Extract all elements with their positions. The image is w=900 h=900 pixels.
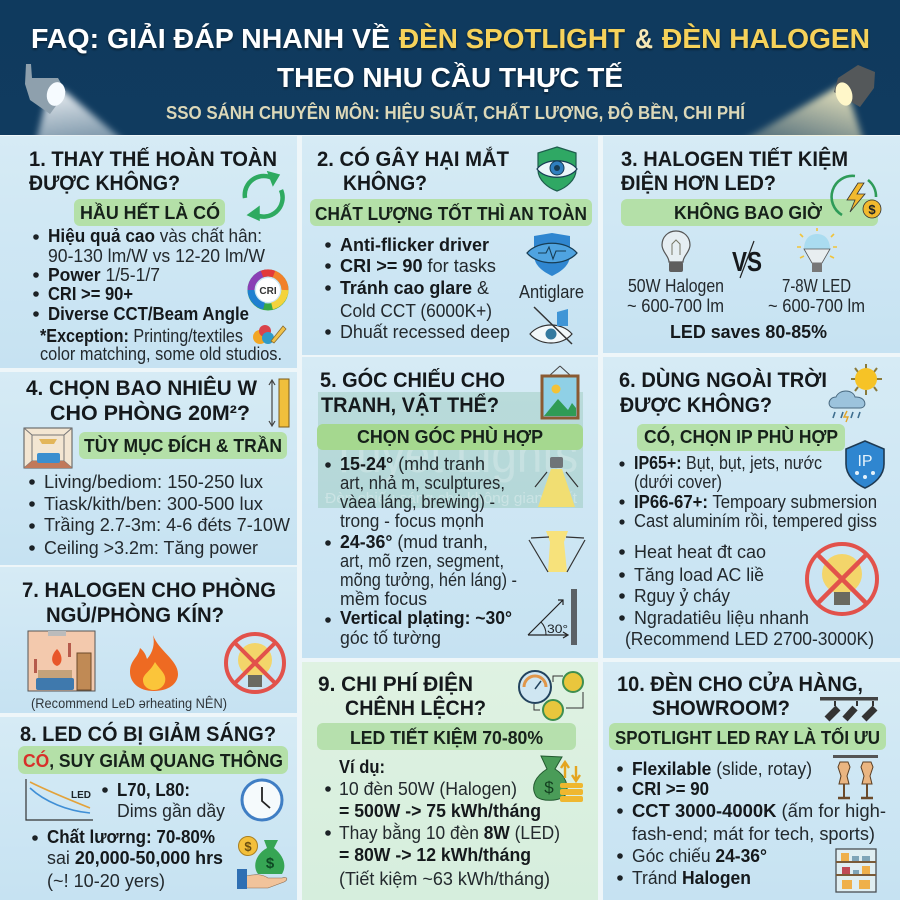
- heading 4: CHO PHÒNG 20M²?: [50, 401, 250, 425]
- bullet list 2: Dhuất recessed deep: [340, 322, 510, 342]
- heading 1: [29, 148, 277, 195]
- icon: versus: VS: [732, 246, 762, 277]
- icon: money in hand: $: [266, 855, 275, 872]
- chart: lumen decay: [26, 779, 93, 820]
- panel 10: shop lighting: [603, 662, 900, 900]
- heading 7: 7. HALOGEN CHO PHÒNG: [22, 578, 276, 602]
- bullet list 10: fash-end; mát for tech, sports): [632, 824, 875, 844]
- heading 9: CHÊNH LỆCH?: [345, 696, 486, 720]
- heading 3: [621, 147, 848, 195]
- icon: clock: [242, 780, 282, 820]
- bullet list 6a: Cast aluminím rồi, tempered giss: [634, 511, 877, 531]
- bullet list 4: Ceiling >3.2m: Tăng power: [44, 538, 258, 558]
- icon: mannequins: [833, 755, 878, 798]
- bullet list 4: Tiask/kith/ben: 300-500 lux: [44, 494, 263, 514]
- icon: palette and pencil: [253, 325, 286, 344]
- bullet list 6a: (dưới cover): [634, 472, 722, 492]
- icon: money in hand: [237, 836, 287, 889]
- bullet list 10: CRI >= 90: [632, 779, 709, 799]
- icon: ruler: [269, 379, 289, 427]
- bullet list 5: vàea láng, brewing) -: [340, 492, 495, 512]
- heading 7: [22, 578, 276, 627]
- bullet list 1: Diverse CCT/Beam Angle: [48, 304, 249, 324]
- bullet list 6b: Ngradatiêu liệu nhanh: [634, 608, 809, 628]
- bullet list 2: Anti-flicker driver: [340, 235, 489, 255]
- icon: money bag and coins: $: [544, 778, 554, 797]
- bullet list 10: Flexilable (slide, rotay): [632, 759, 812, 779]
- bullet list 5: 15-24° (mhd tranh: [340, 454, 485, 474]
- bullet list 6b: (Recommend LED 2700-3000K): [625, 629, 874, 649]
- cost example text: [325, 757, 560, 889]
- answer pill 3: KHÔNG BAO GIỜ: [674, 202, 822, 223]
- icon: CRI colour wheel: CRI: [259, 286, 277, 297]
- bullet list 6a: IP65+: Bụt, bụt, jets, nước: [634, 453, 822, 473]
- chart: lumen decay: LED: [71, 789, 91, 801]
- answer pill 4: TÙY MỤC ĐÍCH & TRẦN: [84, 435, 282, 456]
- bullet list 2: Cold CCT (6000K+): [340, 301, 492, 321]
- icon: energy cycle: [832, 176, 881, 218]
- icon: wide beam: [529, 531, 585, 572]
- icon: anti-flicker eye: [527, 233, 577, 276]
- icon: no halogen bulb: [226, 634, 284, 692]
- bullet list 1: *Exception: Printing/textiles: [40, 326, 243, 346]
- answer pill 5: [317, 424, 583, 450]
- panel 6: outdoor use: [603, 357, 900, 658]
- panel 3: halogen vs LED savings: [603, 136, 900, 353]
- panel 8: LED dimming: [0, 717, 297, 900]
- heading 2: 2. CÓ GÂY HẠI MẮT: [317, 147, 509, 171]
- watermark band: Tuyet Lights: [330, 427, 578, 483]
- label: antiglare: Antiglare: [519, 282, 584, 302]
- icon: LED bulb: [797, 228, 837, 272]
- bullet list 8b: sai 20,000-50,000 hrs: [47, 848, 223, 868]
- comparison text: ~ 600-700 lm: [627, 296, 724, 316]
- icon: energy meter: [519, 671, 583, 720]
- heading 5: [320, 368, 505, 417]
- icon: money bag and coins: [534, 756, 583, 802]
- bullet list 1: Hiệu quả cao vàs chất hân:: [48, 226, 262, 246]
- heading 9: [318, 672, 486, 720]
- icon: versus: [732, 241, 762, 278]
- answer pill 5: CHỌN GÓC PHÙ HỢP: [357, 426, 543, 447]
- bullet list 5: art, mõ rzen, segment,: [340, 551, 504, 571]
- panel 1: replace completely: [0, 136, 297, 368]
- cost example text: Thay bằng 10 đèn 8W (LED): [339, 822, 560, 843]
- panel 4: wattage: [0, 372, 297, 565]
- bullet list 6a: [619, 453, 877, 531]
- heading 10: 10. ĐÈN CHO CỬA HÀNG,: [617, 672, 863, 696]
- heading 2: [317, 147, 509, 195]
- heading 5: 5. GÓC CHIẾU CHO: [320, 368, 505, 392]
- bullet list 8b: (~! 10-20 yers): [47, 871, 165, 891]
- heading 3: ĐIỆN HƠN LED?: [621, 171, 776, 195]
- answer pill 10: SPOTLIGHT LED RAY LÀ TỐI ƯU: [615, 727, 880, 748]
- panel 9: electricity cost: [302, 662, 598, 900]
- icon: 30 degree angle: [528, 589, 577, 645]
- icon: eye shield: [537, 147, 577, 191]
- comparison text: 50W Halogen: [628, 276, 724, 296]
- right spotlight lamp: [740, 65, 875, 142]
- bullet list 10: [617, 759, 886, 888]
- heading 4: 4. CHỌN BAO NHIÊU W: [26, 376, 257, 400]
- bullet list 5: [325, 454, 517, 648]
- heading 9: 9. CHI PHÍ ĐIỆN: [318, 672, 473, 696]
- bullet list 4: Living/bediom: 150-250 lux: [44, 472, 263, 492]
- answer pill 2: CHẤT LƯỢNG TỐT THÌ AN TOÀN: [315, 203, 587, 224]
- heading 8: 8. LED CÓ BỊ GIẢM SÁNG?: [20, 722, 276, 746]
- icon: glare eye: [530, 307, 572, 344]
- icon: money in hand: $: [244, 839, 252, 854]
- bullet list 8b: [32, 827, 223, 891]
- bullet list 10: Tránd Halogen: [632, 868, 751, 888]
- bullet list 8a: Dims gần dầy: [117, 801, 225, 821]
- bullet list 1: Power 1/5-1/7: [48, 265, 160, 285]
- bullet list 10: Góc chiếu 24-36°: [632, 846, 767, 866]
- title: ĐÈN SPOTLIGHT: [399, 23, 625, 54]
- bullet list 10: CCT 3000-4000K (ấm for high-: [632, 801, 886, 821]
- icon: track lights: [820, 697, 878, 719]
- bullet list 8a: L70, L80:: [117, 780, 190, 800]
- bullet list 5: mềm focus: [340, 589, 427, 609]
- bullet list 5: Vertical plạting: ~30°: [340, 608, 512, 628]
- bullet list 5: trong - focus mọnh: [340, 511, 484, 531]
- bullet list 1: CRI >= 90+: [48, 284, 133, 304]
- icon: no halogen bulb: [807, 544, 877, 614]
- title: ĐÈN HALOGEN: [662, 23, 870, 54]
- heading 7: NGỦ/PHÒNG KÍN?: [46, 603, 224, 627]
- answer pill 9: LED TIẾT KIỆM 70-80%: [350, 727, 543, 748]
- bullet list 6b: [619, 542, 874, 649]
- bullet list 2: Tránh cao glare &: [340, 278, 489, 298]
- bullet list 5: 24-36° (mud tranh,: [340, 532, 488, 552]
- cost example text: Ví dụ:: [339, 757, 385, 777]
- icon: overheated bedroom: [28, 631, 95, 691]
- heading 5: TRANH, VẬT THỂ?: [321, 393, 499, 417]
- title: THEO NHU CẦU THỰC TẾ: [277, 62, 623, 93]
- icon: CRI colour wheel: [251, 273, 285, 307]
- watermark band: Đèn chiếu sáng cho không gian chất: [325, 490, 578, 507]
- bullet list 6b: Heat heat đt cao: [634, 542, 766, 562]
- comparison text: [627, 276, 865, 342]
- title: &: [635, 23, 653, 54]
- icon: shelves: [836, 849, 876, 892]
- bullet list 5: góc tố tường: [340, 628, 441, 648]
- header banner: [0, 0, 900, 142]
- icon: room: [24, 428, 72, 468]
- bullet list 8b: Chất lươrng: 70-80%: [47, 827, 215, 847]
- subtitle: SSO SÁNH CHUYÊN MÔN: HIỆU SUẤT, CHẤT LƯỢNG, ĐỘ BỀN, CHI PHÍ: [166, 102, 746, 123]
- answer pill 3: [621, 199, 878, 226]
- title: [31, 22, 870, 93]
- title: FAQ: GIẢI ĐÁP NHANH VỀ: [31, 22, 390, 54]
- heading 3: 3. HALOGEN TIẾT KIỆM: [621, 147, 848, 171]
- bullet list 1: color matching, some old studios.: [40, 344, 282, 364]
- icon: flame: [130, 635, 178, 691]
- panel 5: beam angle: [302, 357, 598, 658]
- bullet list 4: [29, 472, 290, 558]
- heading 1: ĐƯỢC KHÔNG?: [29, 171, 180, 195]
- heading 2: KHÔNG?: [343, 171, 427, 195]
- icon: IP shield: [846, 441, 884, 488]
- bullet list 6b: Rguy ỷ cháy: [634, 586, 730, 606]
- icon: halogen bulb: [662, 231, 690, 272]
- heading 6: ĐƯỢC KHÔNG?: [620, 393, 772, 417]
- heading 1: 1. THAY THẾ HOÀN TOÀN: [29, 148, 277, 171]
- icon: energy cycle: $: [868, 202, 876, 217]
- heading 6: [619, 368, 827, 417]
- cost example text: = 500W -> 75 kWh/tháng: [339, 801, 541, 821]
- watermark band: [318, 392, 583, 508]
- bullet list 2: CRI >= 90 for tasks: [340, 256, 496, 276]
- bullet list 1: [33, 226, 282, 364]
- icon: narrow beam: [535, 457, 578, 507]
- panel 7: halogen in bedrooms: [0, 567, 297, 713]
- cost example text: (Tiết kiệm ~63 kWh/tháng): [339, 869, 550, 889]
- bullet list 5: art, nhả m, sculptures,: [340, 473, 505, 493]
- bullet list 4: Trầing 2.7-3m: 4-6 đéts 7-10W: [44, 515, 290, 535]
- comparison text: 7-8W LED: [782, 276, 851, 296]
- bullet list 8a: [102, 780, 225, 821]
- icon: sun and rain cloud: [829, 364, 882, 422]
- left spotlight lamp: [25, 64, 125, 142]
- cost example text: = 80W -> 12 kWh/tháng: [339, 845, 531, 865]
- icon: recycle arrows: [245, 172, 283, 220]
- bullet list 6a: IP66-67+: Tempoary submersion: [634, 492, 877, 512]
- heading 6: 6. DÙNG NGOÀI TRỜI: [619, 368, 827, 392]
- heading 10: SHOWROOM?: [652, 697, 790, 720]
- answer pill 9: [317, 723, 576, 750]
- icon: IP shield: IP: [857, 453, 873, 470]
- icon: framed picture: [542, 366, 578, 418]
- bullet list 5: mõng tưởng, hén láng) -: [340, 570, 517, 590]
- note 7: (Recommend LeD ərheating NÊN): [31, 695, 227, 711]
- icon: 30 degree angle: 30°: [547, 622, 568, 636]
- comparison text: LED saves 80-85%: [670, 322, 827, 342]
- heading 10: [617, 672, 863, 720]
- bullet list 2: [325, 235, 510, 342]
- comparison text: ~ 600-700 lm: [768, 296, 865, 316]
- answer pill 8: CÓ, SUY GIẢM QUANG THÔNG: [23, 750, 283, 771]
- answer pill 6: CÓ, CHỌN IP PHÙ HỢP: [644, 426, 838, 447]
- bullet list 6b: Tăng load AC liề: [634, 565, 764, 585]
- bullet list 1: 90-130 lm/W vs 12-20 lm/W: [48, 246, 265, 266]
- cost example text: 10 đèn 50W (Halogen): [339, 779, 517, 799]
- heading 4: [26, 376, 257, 425]
- panel 2: eye safety: [302, 136, 598, 355]
- answer pill 1: HẦU HẾT LÀ CÓ: [80, 202, 220, 223]
